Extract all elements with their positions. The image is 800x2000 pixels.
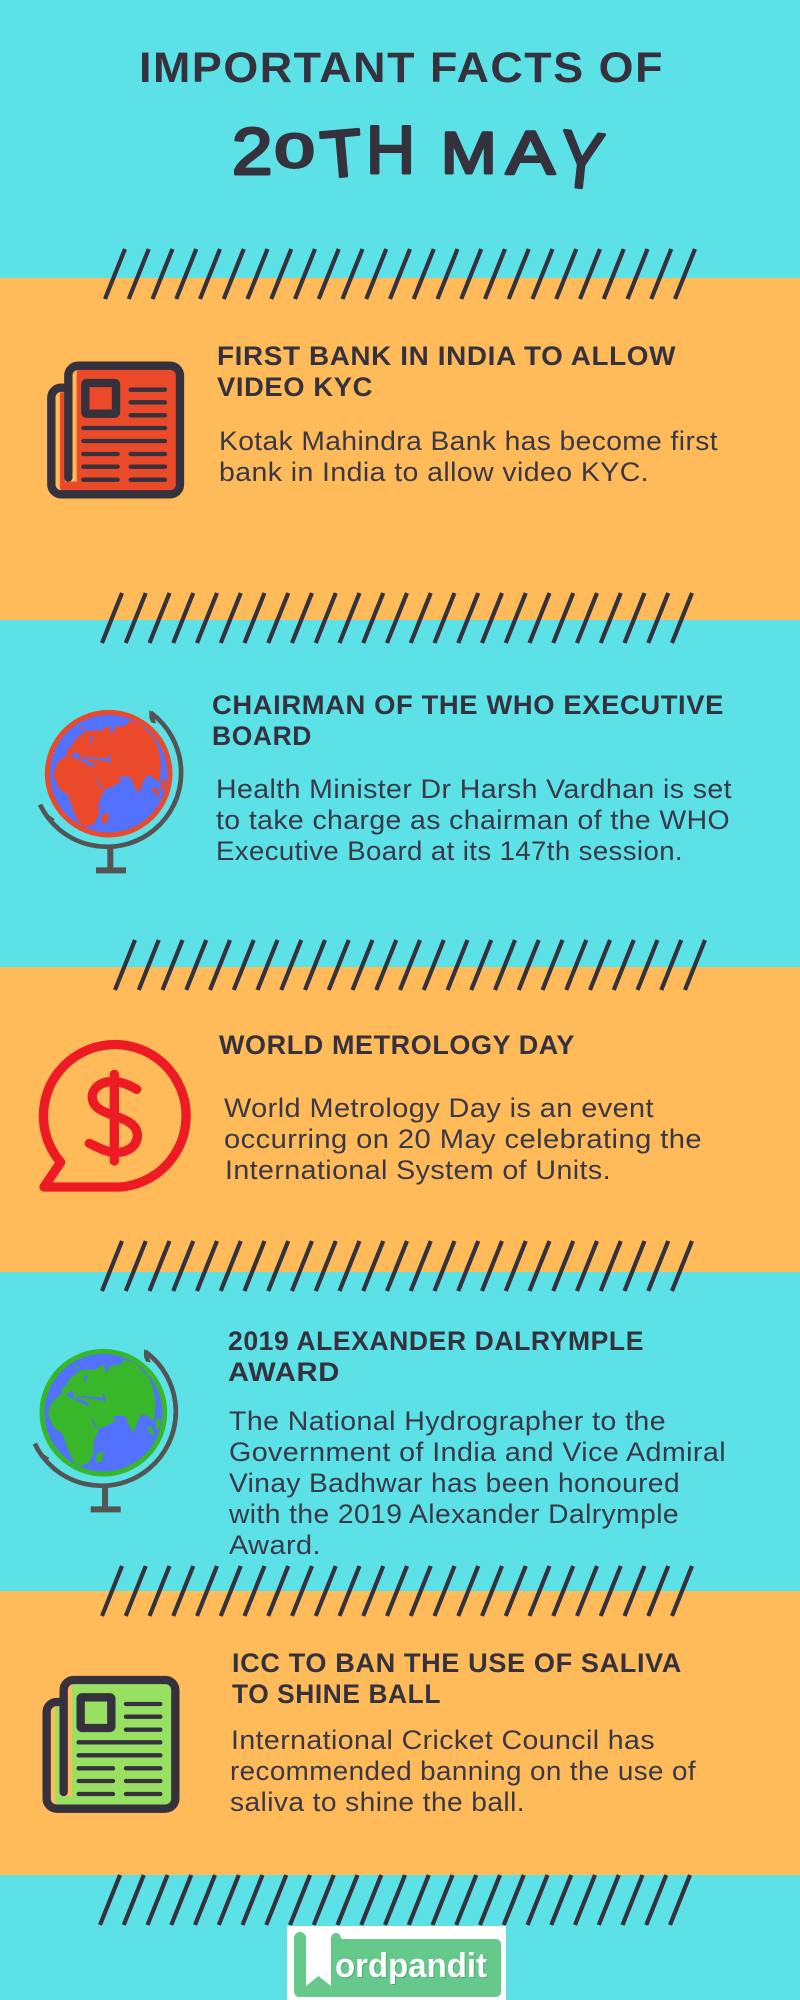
body text line 4: with the 2019 Alexander Dalrymple <box>228 1499 679 1529</box>
body text line 2: to take charge as chairman of the WHO <box>216 805 730 835</box>
body text: World Metrology: World Metrology Day is an event <box>224 1093 654 1123</box>
body text line 2: bank in India to allow video KYC. <box>219 457 649 487</box>
body text line 2: Government of India and Vice Admiral <box>229 1437 726 1467</box>
logo: Wordpandit <box>287 1926 506 2000</box>
body text: ICC: International Cricket Council has <box>231 1725 655 1755</box>
divider stripes 6 <box>100 1875 690 1925</box>
subtitle: date: H <box>366 112 415 188</box>
body text line 3: saliva to shine the ball. <box>230 1787 525 1817</box>
body text: Kotak: Kotak Mahindra Bank has become first <box>219 426 718 456</box>
icon: dollar speech bubble <box>43 1045 186 1187</box>
icon: green globe <box>35 1349 176 1512</box>
body text line 5: Award. <box>229 1530 321 1560</box>
heading line 2: TO SHINE BALL <box>232 1679 441 1709</box>
divider stripes 3 <box>115 940 705 990</box>
body text line 3: Executive Board at its 147th session. <box>216 836 683 866</box>
subtitle: date: M <box>441 121 497 186</box>
subtitle: date: 2 <box>232 114 272 188</box>
divider stripes 4 <box>102 1241 692 1291</box>
icon: green newspaper <box>47 1680 175 1809</box>
heading line 2: AWARD <box>228 1357 340 1387</box>
subtitle: date <box>232 112 608 207</box>
subtitle: date: A <box>506 120 555 188</box>
heading line 2: BOARD <box>212 721 312 751</box>
divider stripes 2 <box>102 593 692 643</box>
panel: orange band 2 <box>0 967 800 1272</box>
body text line 2: occurring on 20 May celebrating the <box>224 1124 702 1154</box>
heading: metrology day: WORLD METROLOGY DAY <box>219 1030 575 1060</box>
heading: ICC saliva: ICC TO BAN THE USE OF SALIVA <box>232 1648 682 1678</box>
logo: Wordpandit: ordpandit <box>336 1948 488 1986</box>
heading: first bank: FIRST BANK IN INDIA TO ALLOW <box>217 341 676 371</box>
heading line 2: VIDEO KYC <box>217 372 373 402</box>
icon: red globe <box>40 710 181 873</box>
body text: Health Minister: Health Minister Dr Harsh Vardhan is set <box>216 774 732 804</box>
title: IMPORTANT FACTS OF <box>139 44 664 92</box>
panel: orange band 1 <box>0 278 800 620</box>
divider stripes 1 <box>105 249 695 299</box>
body text line 3: International System of Units. <box>225 1155 611 1185</box>
panel: orange band 3 <box>0 1591 800 1875</box>
icon: red newspaper <box>51 366 180 494</box>
body text line 2: recommended banning on the use of <box>230 1756 696 1786</box>
subtitle: date: T <box>318 116 365 193</box>
subtitle: date: Y <box>555 113 608 207</box>
heading: Dalrymple award: 2019 ALEXANDER DALRYMPLE <box>228 1326 644 1356</box>
body text line 3: Vinay Badhwar has been honoured <box>229 1468 680 1498</box>
heading: WHO chairman: CHAIRMAN OF THE WHO EXECUTIVE <box>212 690 724 720</box>
subtitle: date: 0 <box>275 125 314 177</box>
body text: National Hydrographer: The National Hydrographer to the <box>229 1406 666 1436</box>
divider stripes 5 <box>102 1566 692 1616</box>
logo: Wordpandit: ordpandit <box>335 1947 487 1985</box>
